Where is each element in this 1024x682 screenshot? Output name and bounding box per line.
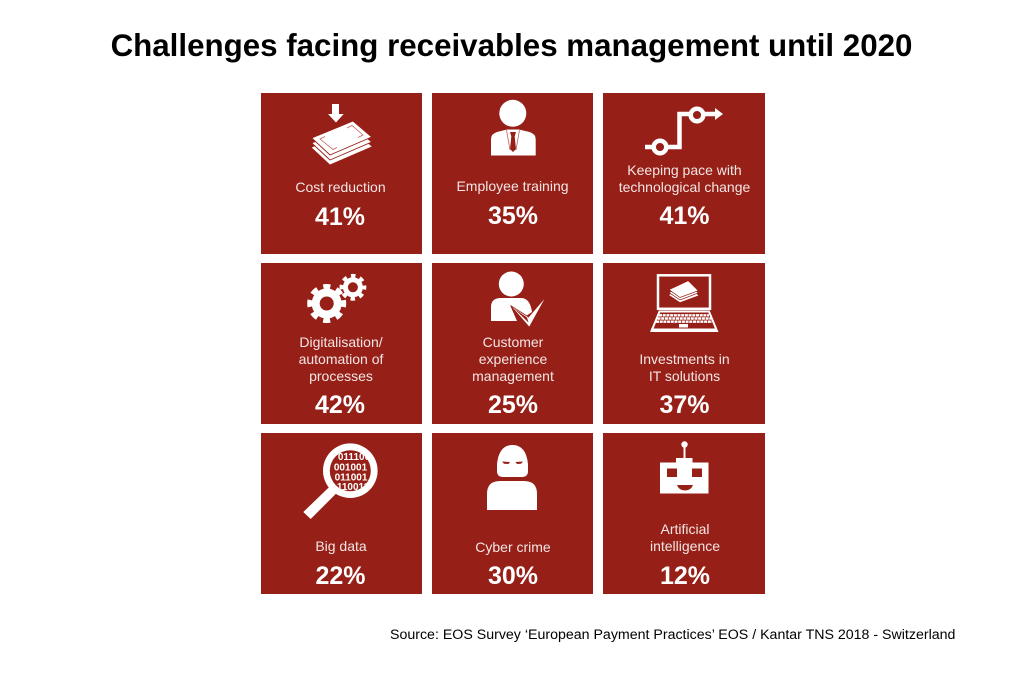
- value: 41%: [659, 202, 710, 230]
- label: Artificial: [660, 521, 710, 537]
- label: Cost reduction: [295, 179, 386, 195]
- icon: magnifier over binary digits: [303, 443, 378, 519]
- label: Cyber crime: [475, 539, 551, 555]
- label line 3: processes: [309, 368, 373, 384]
- value: 30%: [488, 562, 538, 590]
- value: 41%: [315, 203, 365, 231]
- icon: gears: [310, 276, 364, 320]
- value: 25%: [488, 391, 538, 419]
- binary line 1: 011100: [338, 452, 371, 463]
- panel: digitalisation: [261, 263, 422, 424]
- label: Employee training: [456, 178, 569, 194]
- panel: IT solutions: [603, 263, 765, 424]
- icon: banknotes with down arrow: [312, 104, 372, 164]
- title: Challenges facing receivables management until 2020: [111, 28, 912, 63]
- label line 2: experience: [479, 351, 547, 367]
- binary line 2: 001001: [334, 462, 368, 474]
- value: 22%: [315, 562, 366, 590]
- panel: cost reduction: [261, 93, 422, 254]
- label line 2: IT solutions: [649, 368, 720, 384]
- icon: masked hacker: [487, 445, 537, 510]
- label: Keeping pace with: [627, 162, 742, 178]
- panel: big data: [261, 433, 422, 594]
- value: 42%: [315, 391, 365, 419]
- panel: employee training: [432, 93, 593, 254]
- icon: robot face: [660, 441, 708, 494]
- label line 2: intelligence: [650, 538, 720, 554]
- source note: Source: EOS Survey ‘European Payment Practices’ EOS / Kantar TNS 2018 - Switzerland: [390, 627, 955, 643]
- value: 12%: [660, 562, 710, 590]
- binary line 3: 011001: [335, 472, 368, 484]
- binary line 4: 110011: [337, 482, 370, 493]
- panel: customer experience: [432, 263, 593, 424]
- panel: technological change: [603, 93, 765, 254]
- icon: path with arrow: [645, 108, 723, 153]
- label: Big data: [315, 538, 367, 554]
- panel: cyber crime: [432, 433, 593, 594]
- icon: person with check mark: [491, 272, 547, 327]
- label: Digitalisation/: [299, 334, 383, 350]
- panel: artificial intelligence: [603, 433, 765, 594]
- value: 37%: [659, 391, 710, 419]
- icon: businessman: [491, 100, 536, 156]
- label line 2: technological change: [619, 179, 750, 195]
- icon: laptop: [651, 275, 717, 332]
- label line 3: management: [472, 368, 554, 384]
- value: 35%: [488, 202, 538, 230]
- label: Customer: [483, 334, 544, 350]
- label line 2: automation of: [299, 351, 384, 367]
- label: Investments in: [639, 351, 730, 367]
